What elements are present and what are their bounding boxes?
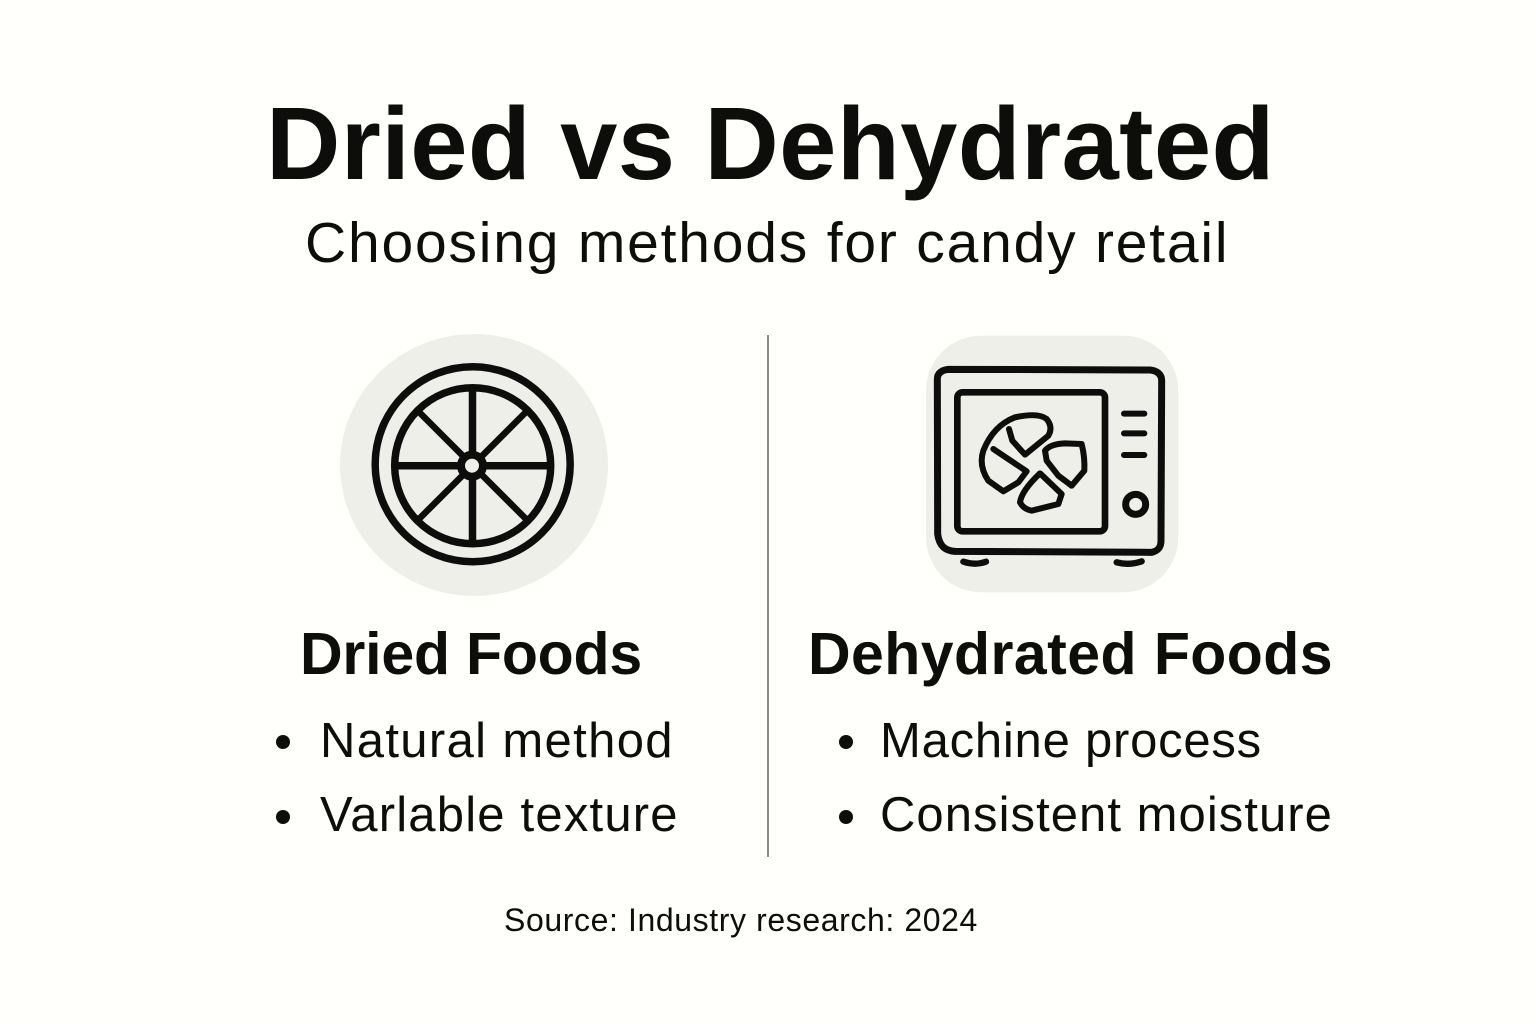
subtitle: Choosing methods for candy retail	[305, 211, 1229, 275]
list: dried foods	[276, 714, 679, 842]
icon: dried citrus slice	[340, 334, 608, 596]
list: dehydrated foods	[839, 714, 1333, 842]
list: dried foods: Varlable texture	[320, 788, 679, 842]
icon: dehydrator machine	[926, 336, 1178, 592]
list: dehydrated foods: Consistent moisture	[880, 788, 1333, 842]
list: dehydrated foods: Machine process	[880, 714, 1262, 768]
title: Dried vs Dehydrated	[266, 86, 1275, 201]
center divider	[767, 335, 769, 857]
heading: dried foods: Dried Foods	[300, 621, 642, 687]
heading: dehydrated foods: Dehydrated Foods	[808, 621, 1333, 687]
list: dried foods: Natural method	[320, 714, 674, 768]
source note: Source: Industry research: 2024	[504, 902, 978, 938]
